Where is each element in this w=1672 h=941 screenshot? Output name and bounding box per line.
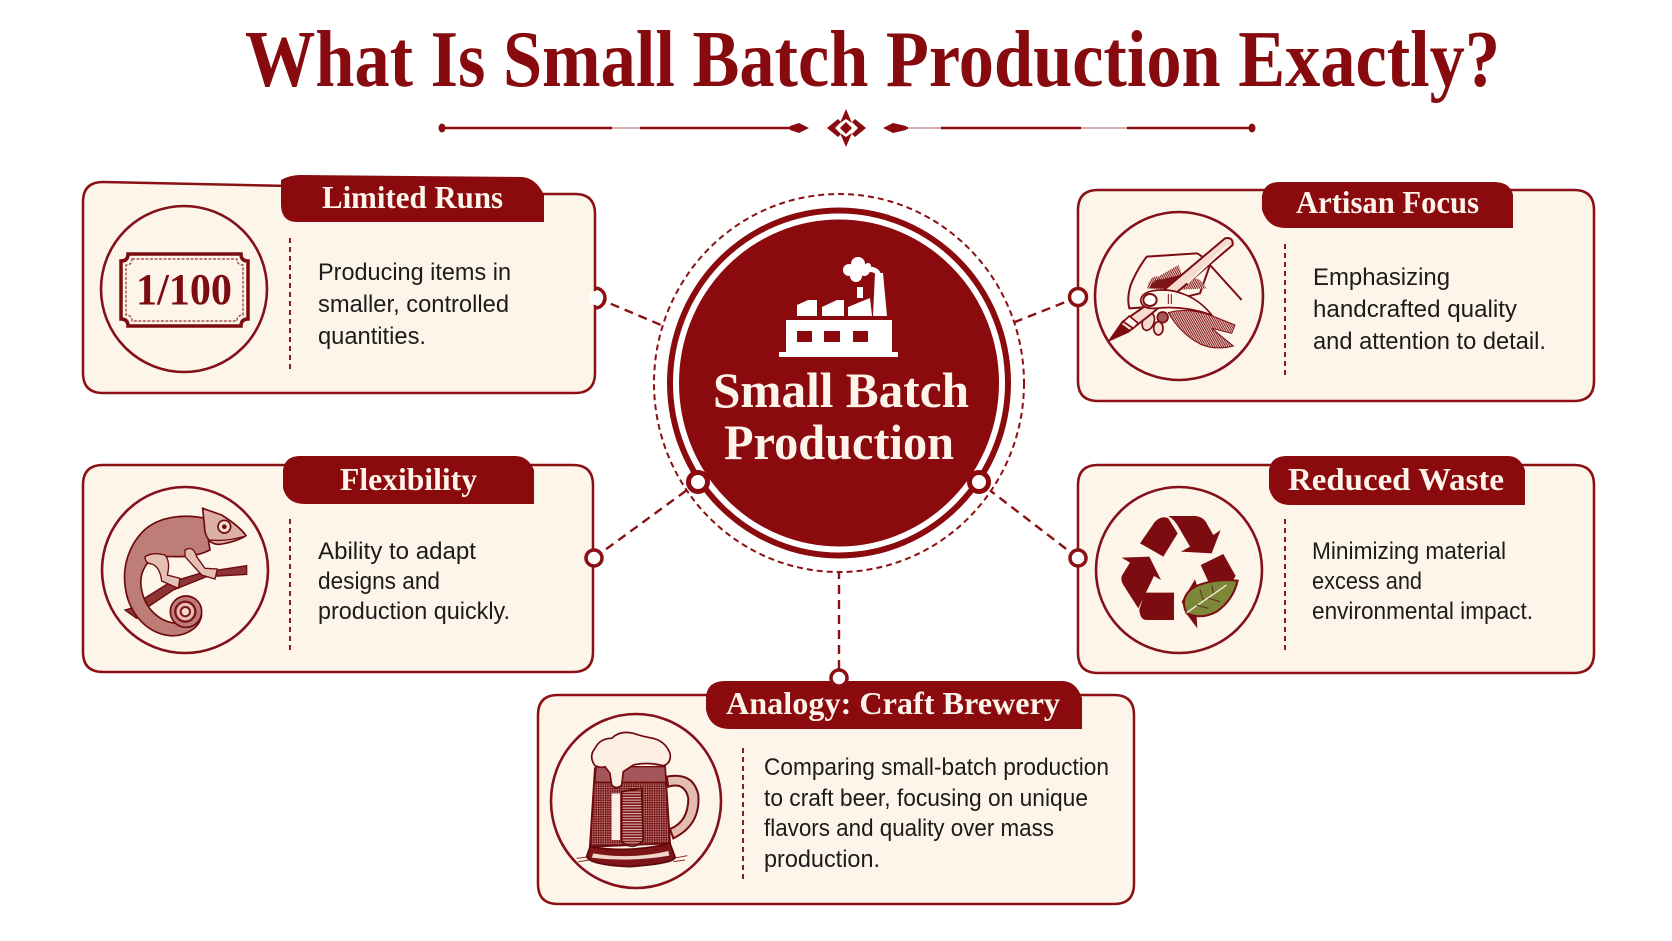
text: analogy: production. xyxy=(764,846,880,873)
connector node xyxy=(586,550,602,566)
heading tab: analogy: Analogy: Craft Brewery xyxy=(726,685,1060,721)
connector node: top of analogy xyxy=(831,670,847,686)
connector node xyxy=(1070,550,1086,566)
heading tab: artisan focus xyxy=(1262,182,1513,228)
icon: 1/100 badge xyxy=(101,206,267,372)
hub label: Small Batch xyxy=(713,362,969,418)
panel: analogy craft brewery xyxy=(538,681,1134,904)
heading tab: reduced waste: Reduced Waste xyxy=(1288,461,1504,497)
text: analogy: flavors and quality over mass xyxy=(764,815,1054,842)
hub label xyxy=(713,362,969,470)
text: reduced waste: excess and xyxy=(1312,568,1422,595)
text: limited runs: quantities. xyxy=(318,323,426,350)
heading tab: reduced waste xyxy=(1269,456,1525,505)
icon: hand holding brush xyxy=(1095,212,1263,380)
heading tab: flexibility xyxy=(283,456,534,504)
text: artisan focus: and attention to detail. xyxy=(1313,328,1546,355)
icon: beer mug xyxy=(551,714,721,888)
text: analogy: to craft beer, focusing on unique xyxy=(764,785,1088,812)
heading tab: limited runs: Limited Runs xyxy=(322,179,503,215)
heading tab: analogy xyxy=(706,681,1082,729)
text: analogy: Comparing small-batch production xyxy=(764,754,1109,781)
panel: flexibility xyxy=(83,456,602,672)
title: What Is Small Batch Production Exactly? xyxy=(245,16,1500,104)
connector lines xyxy=(594,297,1078,678)
text: artisan focus xyxy=(1313,264,1546,355)
icon: 1/100 badge: 1/100 xyxy=(136,265,232,314)
panel: artisan focus xyxy=(1070,182,1594,401)
text: analogy xyxy=(764,754,1109,873)
text: flexibility: designs and xyxy=(318,568,440,595)
hub label: Production xyxy=(724,414,954,470)
panel: limited runs xyxy=(83,175,605,393)
central hub xyxy=(654,194,1024,572)
panel: reduced waste xyxy=(1070,456,1594,673)
text: reduced waste xyxy=(1312,538,1533,625)
text: limited runs: smaller, controlled xyxy=(318,291,509,318)
icon: recycle with leaf xyxy=(1096,487,1262,653)
text: artisan focus: Emphasizing xyxy=(1313,264,1450,291)
connector node xyxy=(1070,288,1086,306)
text: flexibility: production quickly. xyxy=(318,598,510,625)
hub nodes xyxy=(688,472,988,492)
text: flexibility xyxy=(318,538,510,625)
text: artisan focus: handcrafted quality xyxy=(1313,296,1517,323)
text: reduced waste: Minimizing material xyxy=(1312,538,1506,565)
icon: factory xyxy=(779,257,898,357)
title ornament divider xyxy=(438,109,1256,147)
connector node xyxy=(589,288,605,308)
text: flexibility: Ability to adapt xyxy=(318,538,476,565)
text: limited runs xyxy=(318,259,511,350)
text: limited runs: Producing items in xyxy=(318,259,511,286)
text: reduced waste: environmental impact. xyxy=(1312,598,1533,625)
icon: chameleon xyxy=(102,487,268,653)
heading tab: artisan focus: Artisan Focus xyxy=(1296,184,1479,220)
heading tab: flexibility: Flexibility xyxy=(340,461,477,497)
heading tab: limited runs xyxy=(281,175,544,222)
